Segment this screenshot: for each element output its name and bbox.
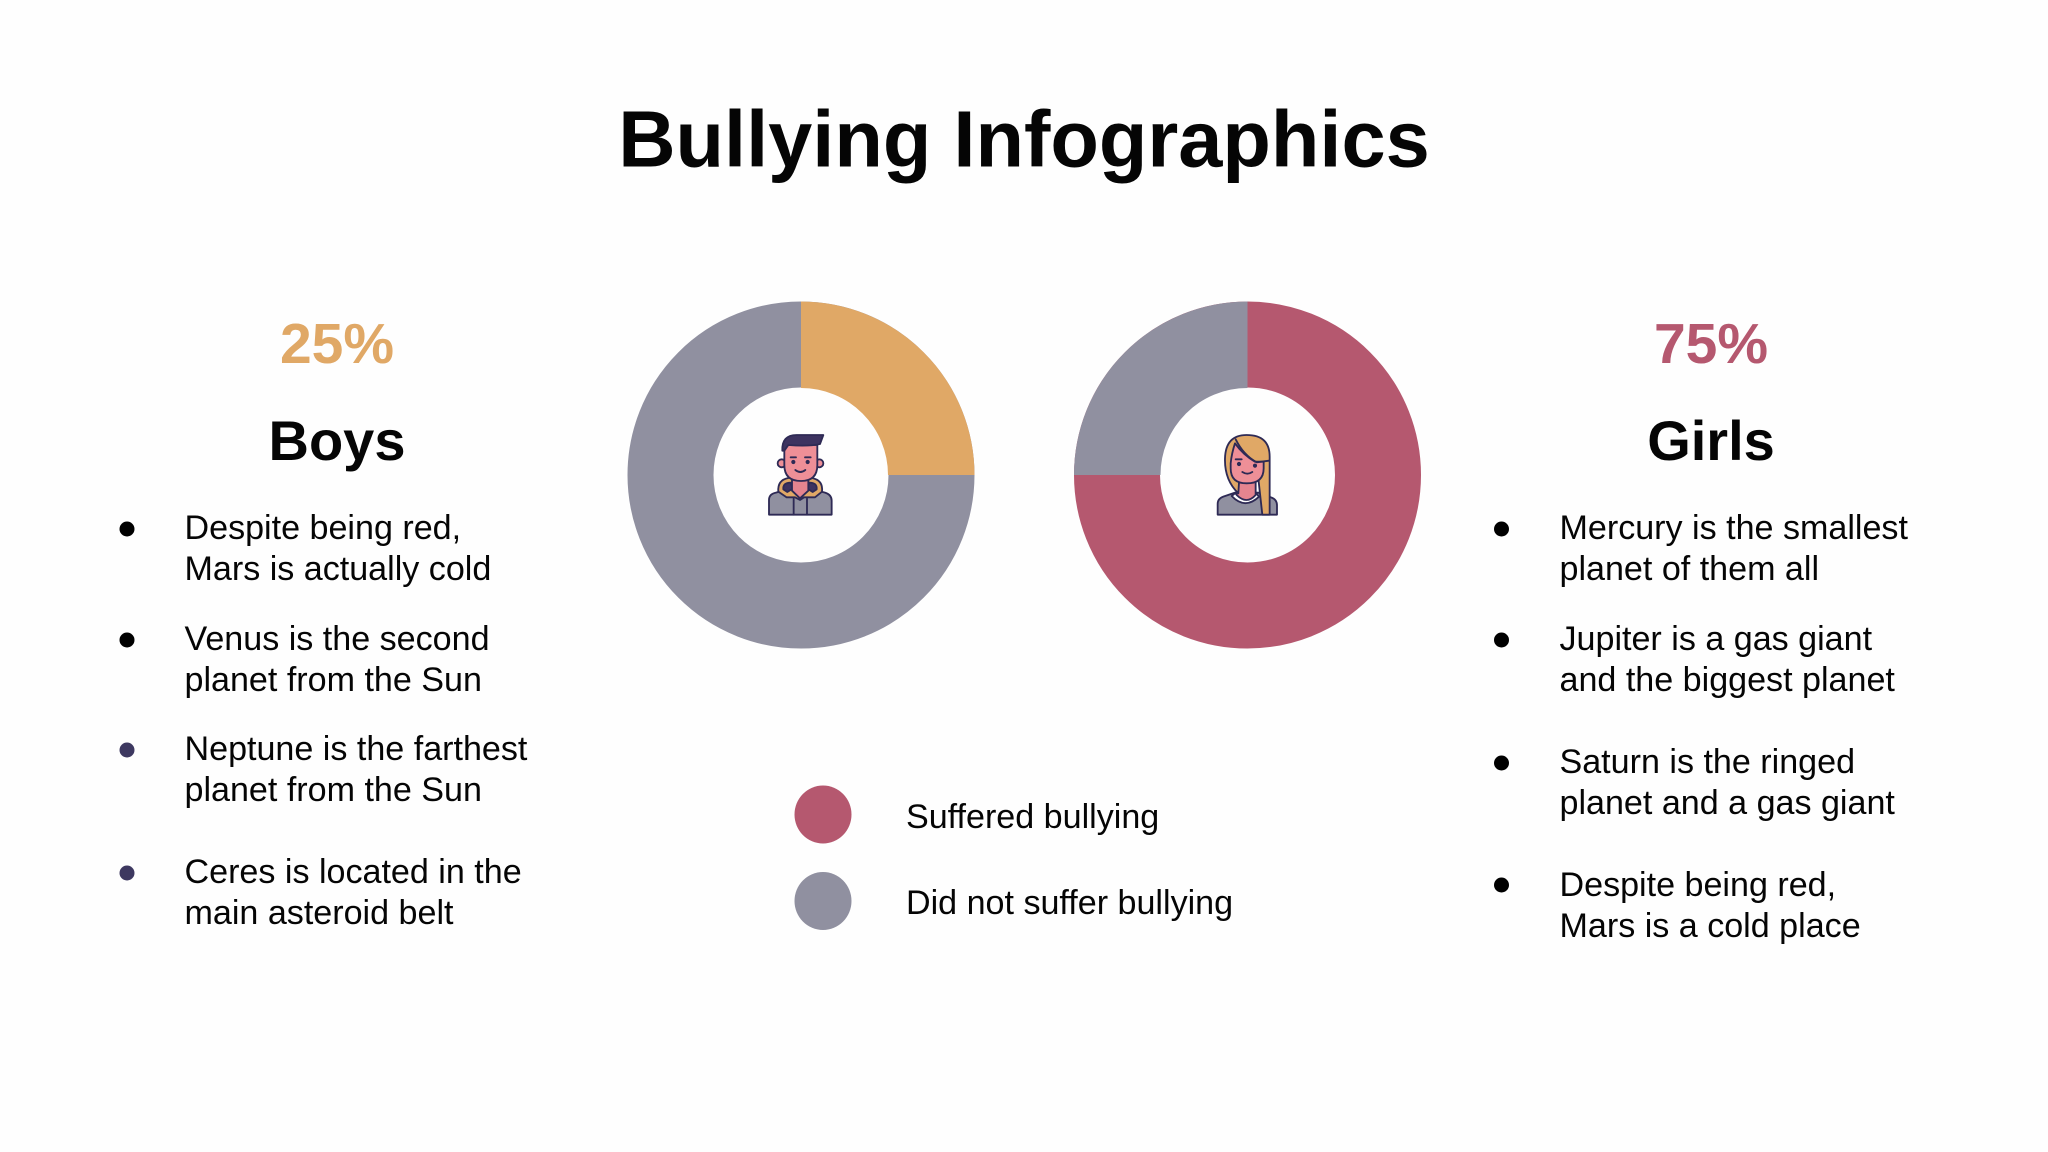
icon: boy avatar [769, 435, 832, 515]
girls item 4: Despite being red, [1560, 866, 1836, 904]
boys item 1: Despite being red, [184, 509, 461, 547]
girls item 2: and the biggest planet [1560, 661, 1895, 699]
girls item 1 [1494, 509, 1908, 588]
girls item 2 [1494, 620, 1895, 699]
legend: suffered bullying: Suffered bullying [906, 798, 1159, 836]
title: Bullying Infographics [618, 94, 1430, 184]
boys heading: Boys [269, 409, 405, 472]
donut chart: boys [670, 302, 974, 606]
boys item 3: Neptune is the farthest [184, 730, 528, 768]
boys item 2 [120, 620, 490, 699]
legend: did not suffer bullying [794, 872, 1233, 930]
girls item 4: Mars is a cold place [1560, 907, 1861, 945]
icon: girl avatar [1218, 435, 1277, 515]
girls item 1: planet of them all [1560, 550, 1819, 588]
boys item 3: planet from the Sun [184, 771, 482, 809]
boys item 2: Venus is the second [184, 620, 490, 658]
girls item 3 [1494, 743, 1895, 822]
boys item 4: main asteroid belt [184, 894, 454, 932]
legend [794, 786, 1233, 930]
girls percentage: 75% [1654, 312, 1768, 376]
panel: girls [1494, 312, 1908, 945]
boys item 1: Mars is actually cold [184, 550, 491, 588]
boys item 1 [120, 509, 491, 588]
boys item 2: planet from the Sun [184, 661, 482, 699]
girls item 2: Jupiter is a gas giant [1560, 620, 1873, 658]
boys item 3 [120, 730, 528, 809]
legend: did not suffer bullying: Did not suffer bullying [906, 884, 1233, 922]
girls heading: Girls [1647, 409, 1775, 472]
boys item 4 [120, 853, 522, 932]
girls item 1: Mercury is the smallest [1560, 509, 1908, 547]
boys percentage: 25% [280, 312, 394, 376]
panel: boys [120, 312, 528, 932]
donut chart: girls [1074, 302, 1378, 606]
girls item 4 [1494, 866, 1861, 945]
girls item 3: Saturn is the ringed [1560, 743, 1855, 781]
legend: suffered bullying [794, 786, 1159, 844]
girls item 3: planet and a gas giant [1560, 784, 1895, 822]
boys item 4: Ceres is located in the [184, 853, 522, 891]
